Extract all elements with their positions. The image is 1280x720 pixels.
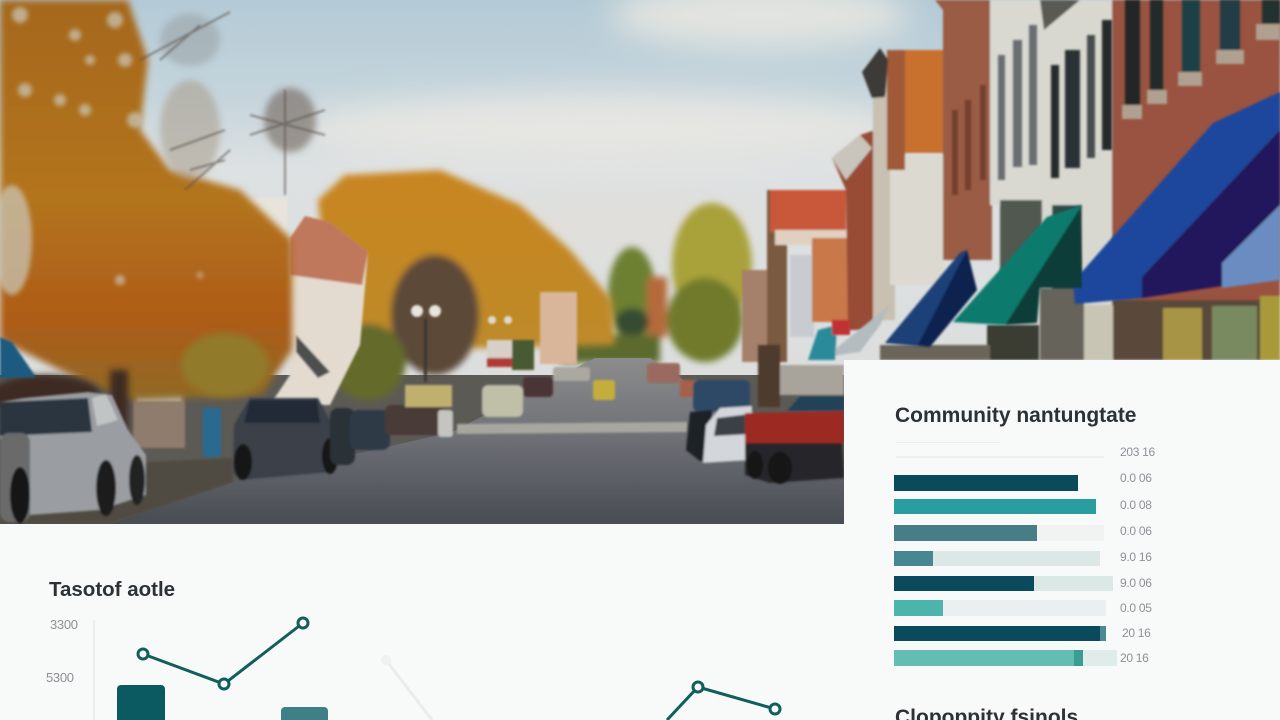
value: row 0: 203 16 <box>1120 445 1155 459</box>
bare branches <box>140 12 325 195</box>
panel: lower-left white chart panel <box>0 524 844 720</box>
row 5 <box>894 576 1152 591</box>
row 4 <box>894 550 1152 566</box>
row 3 <box>894 524 1152 541</box>
lamp posts <box>411 305 512 382</box>
dark car <box>233 398 340 480</box>
building windows <box>952 0 1280 195</box>
combo chart: bars and line <box>94 616 782 720</box>
left buildings <box>133 198 577 448</box>
right-hand buildings <box>742 0 1280 362</box>
left sidewalk <box>0 458 233 524</box>
row 2 <box>894 498 1152 514</box>
row 3: 0.0 06 <box>1120 524 1152 538</box>
bar: dark teal <box>117 685 165 720</box>
sky <box>0 0 1280 400</box>
parked cars left <box>0 367 615 523</box>
faint top row <box>896 442 1000 443</box>
distant trees and building <box>560 203 752 363</box>
line series: left <box>138 618 308 689</box>
faint line fragment <box>386 660 432 720</box>
panel: community participation <box>844 360 1280 720</box>
heading: community panel title: Community nantungtate <box>895 404 1136 427</box>
following cars <box>330 408 355 465</box>
large autumn tree at left <box>0 0 316 430</box>
orange mid-street tree line <box>318 170 615 400</box>
ground behind everything <box>0 375 844 524</box>
line series: right <box>667 682 780 720</box>
row 2: 0.0 08 <box>1120 498 1152 512</box>
row 8 <box>894 650 1149 666</box>
row 5: 9.0 06 <box>1120 576 1152 590</box>
road crossing stripe <box>457 422 687 434</box>
row 6: 0.0 05 <box>1120 601 1152 615</box>
axis label: upper value: 3300 <box>50 617 78 632</box>
row 6 <box>894 600 1152 616</box>
silver car <box>0 392 146 515</box>
row 7 <box>894 626 1151 641</box>
row 1: 0.0 06 <box>1120 471 1152 485</box>
bar list <box>894 442 1155 666</box>
axis label: lower value: 5300 <box>46 670 74 685</box>
row 4: 9.0 16 <box>1120 550 1152 564</box>
row 8: 20 16 <box>1120 651 1149 665</box>
bar: mid teal <box>281 707 328 720</box>
heading: chart title: Tasotof aotle <box>49 578 175 601</box>
row 7: 20 16 <box>1122 626 1151 640</box>
storefront awnings <box>808 92 1280 360</box>
faint header track <box>896 456 1104 458</box>
row 1 <box>894 471 1152 491</box>
road <box>110 358 844 524</box>
parked cars right <box>647 345 844 484</box>
left awning and blue bin <box>0 337 221 457</box>
